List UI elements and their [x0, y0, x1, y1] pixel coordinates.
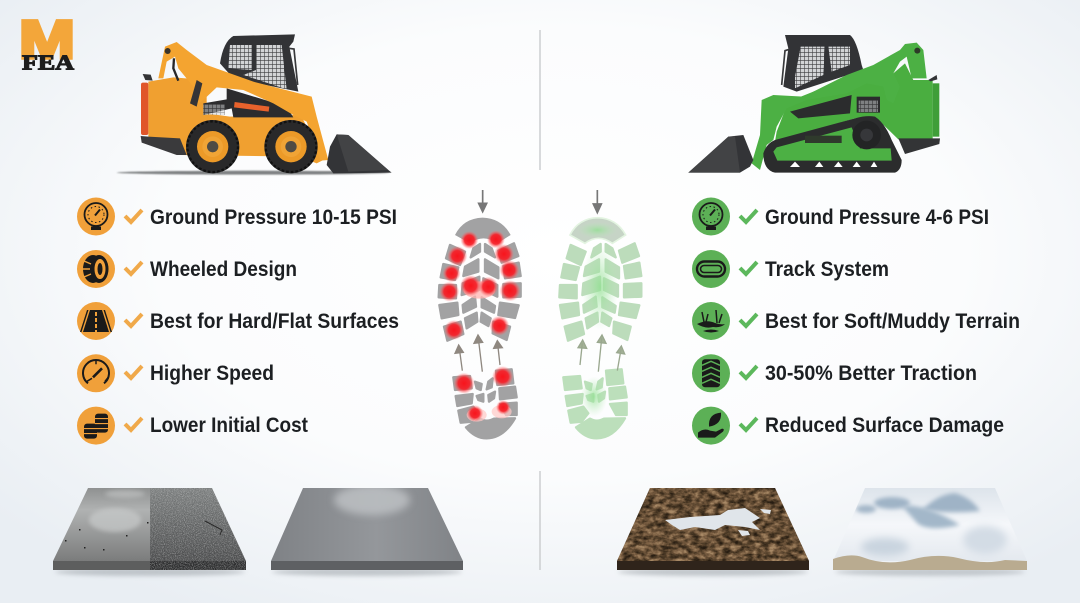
icon: speedometer: [77, 354, 115, 392]
check mark: [740, 210, 757, 222]
center divider bottom: [539, 471, 541, 570]
center divider top: [539, 30, 541, 170]
logo letter M: M: [19, 10, 75, 70]
label: Reduced Surface Damage: [765, 413, 1004, 437]
surface: mud slab with puddle: [617, 488, 809, 576]
label: Ground Pressure 4-6 PSI: [765, 205, 989, 229]
arrows: even reaction: [578, 335, 625, 372]
check mark: [125, 210, 142, 222]
feature: best for soft muddy terrain: [692, 302, 1020, 340]
feature: reduced surface damage: [692, 407, 1004, 445]
icon: pressure gauge: [77, 198, 115, 236]
icon: track: [692, 250, 730, 288]
label: Wheeled Design: [150, 257, 297, 281]
label: Lower Initial Cost: [150, 413, 308, 437]
icon: tread: [692, 354, 730, 392]
feature: ground pressure 10-15 PSI: [77, 198, 397, 236]
surface: snow slab: [833, 488, 1027, 576]
check mark: [125, 418, 142, 430]
check mark: [740, 418, 757, 430]
logo word FEA: FEA: [22, 50, 75, 74]
icon: tire: [77, 250, 115, 288]
arrow: top load: [479, 190, 487, 212]
label: 30-50% Better Traction: [765, 361, 977, 385]
icon: road: [77, 302, 115, 340]
green tracked loader: [688, 35, 977, 173]
check mark: [740, 262, 757, 274]
feature: wheeled design: [77, 250, 297, 288]
feature: lower initial cost: [77, 407, 308, 445]
icon: hand and leaf: [692, 407, 730, 445]
footprint: tracked low pressure: [559, 190, 641, 438]
icon: coin stacks: [77, 407, 115, 445]
check mark: [740, 366, 757, 378]
feature: track system: [692, 250, 889, 288]
right feature list: [692, 198, 1020, 445]
feature: ground pressure 4-6 PSI: [692, 198, 989, 236]
label: Best for Hard/Flat Surfaces: [150, 309, 399, 333]
check mark: [740, 314, 757, 326]
check mark: [125, 262, 142, 274]
surface: concrete and asphalt slab: [53, 488, 246, 576]
label: Track System: [765, 257, 889, 281]
arrows: upward reaction: [455, 335, 502, 372]
logo: M FEA: [19, 10, 75, 74]
feature: higher speed: [77, 354, 274, 392]
arrow: top load: [593, 190, 601, 213]
feature: better traction: [692, 354, 977, 392]
pressure comparison footprints: [439, 190, 641, 438]
label: Higher Speed: [150, 361, 274, 385]
label: Ground Pressure 10-15 PSI: [150, 205, 397, 229]
icon: swamp: [692, 302, 730, 340]
surface: smooth steel slab: [271, 485, 463, 576]
feature: best for hard flat surfaces: [77, 302, 399, 340]
footprint: wheeled high pressure: [439, 190, 521, 438]
label: Best for Soft/Muddy Terrain: [765, 309, 1020, 333]
check mark: [125, 366, 142, 378]
check mark: [125, 314, 142, 326]
left feature list: [77, 198, 399, 445]
icon: pressure gauge: [692, 198, 730, 236]
orange wheeled skid steer loader: [117, 34, 392, 175]
